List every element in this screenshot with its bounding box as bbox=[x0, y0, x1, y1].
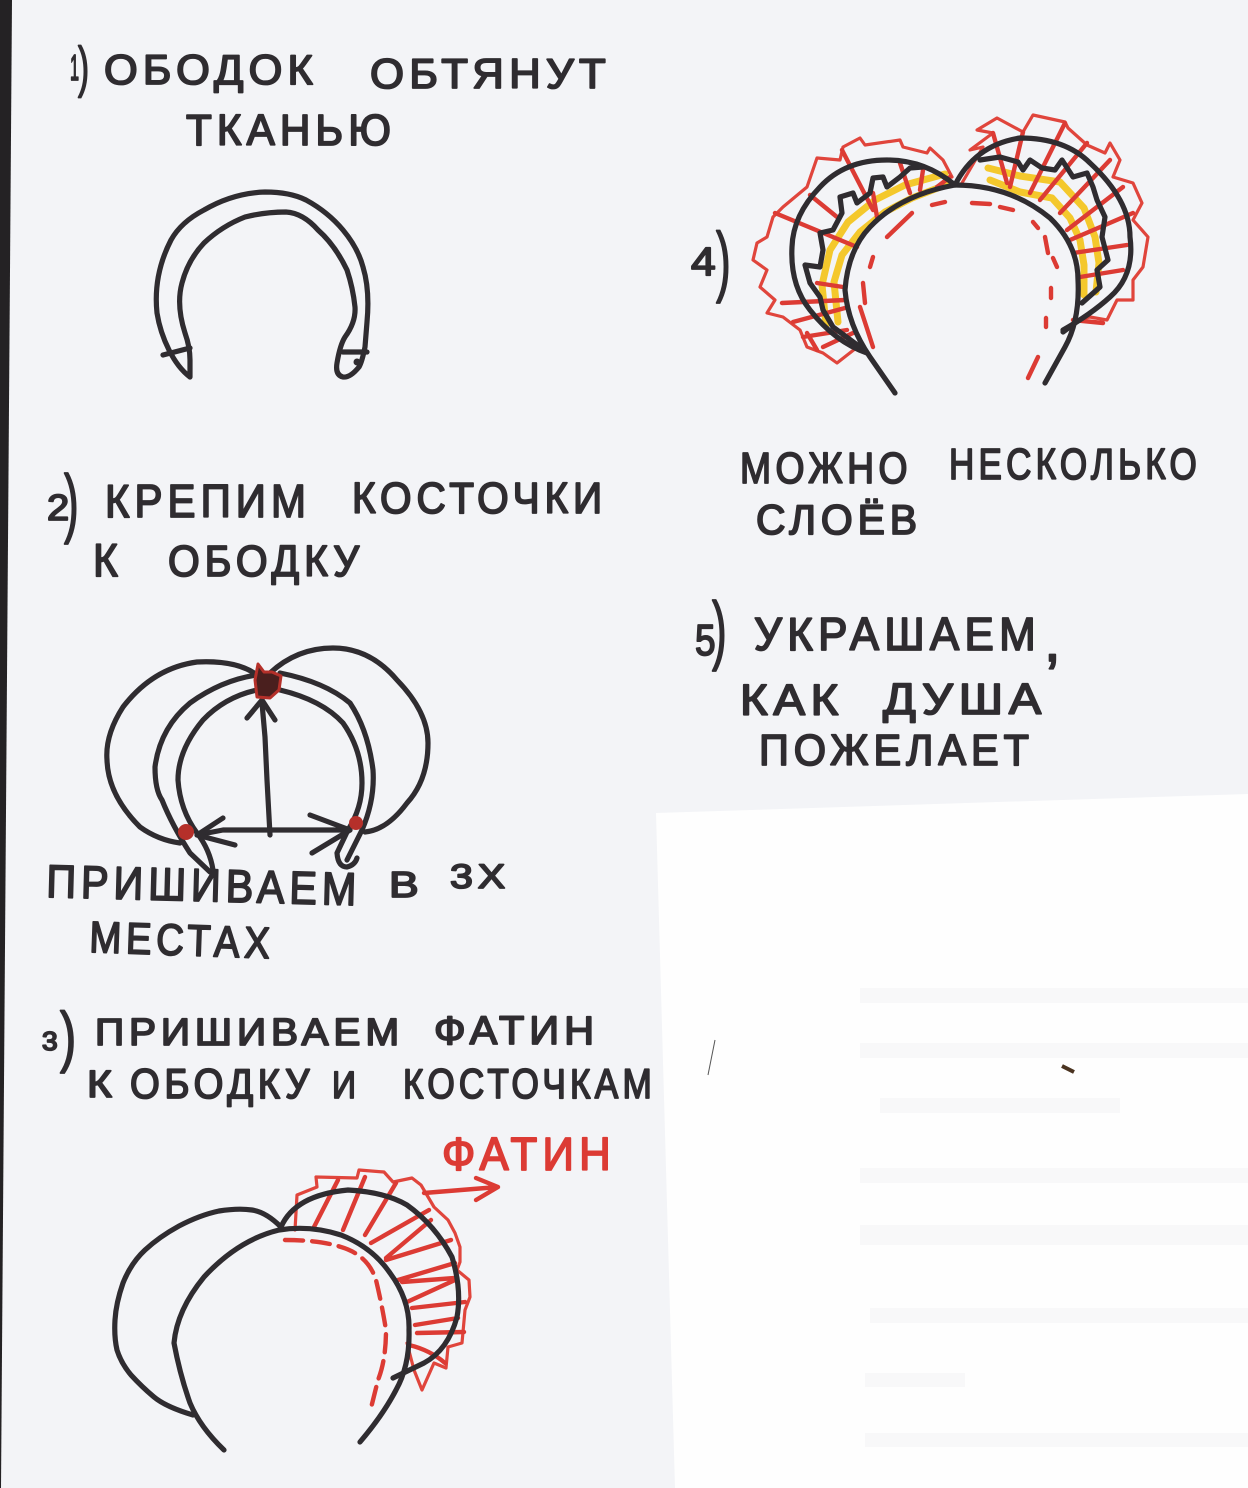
note: sew in three places: В bbox=[389, 864, 424, 905]
heading: step 1: ) bbox=[78, 35, 93, 98]
heading: step 2: КОСТОЧКИ bbox=[352, 474, 607, 523]
label: tulle: ФАТИН bbox=[442, 1128, 616, 1180]
heading: step 4: ) bbox=[716, 216, 736, 304]
panel: step 1 bbox=[70, 35, 611, 377]
note: sew in three places bbox=[46, 855, 510, 968]
heading: step 5: ДУША bbox=[883, 675, 1047, 724]
heading: step 1: 1 bbox=[70, 47, 81, 88]
scanner edge: dark strip bbox=[0, 0, 12, 1488]
drawing: wire bones attached to headband bbox=[107, 648, 428, 872]
panel: overlapping white sheet bbox=[656, 794, 1248, 1488]
note: several layers possible: МОЖНО bbox=[740, 444, 912, 493]
heading: step 2 bbox=[47, 460, 607, 586]
heading: step 3: И bbox=[332, 1065, 360, 1107]
stitch line: dashed bbox=[285, 1240, 386, 1408]
heading: step 2: ОБОДКУ bbox=[168, 537, 364, 586]
note: sew in three places: ПРИШИВАЕМ bbox=[46, 855, 362, 915]
drawing: several layers of tulle bbox=[753, 115, 1148, 393]
stitch marks bbox=[178, 664, 363, 840]
note: sew in three places: 3Х bbox=[450, 858, 510, 896]
panel: step 3 bbox=[42, 999, 656, 1450]
panel: step 4 bbox=[691, 115, 1201, 543]
heading: step 3: КОСТОЧКАМ bbox=[403, 1060, 656, 1107]
tulle frill bbox=[295, 1170, 470, 1390]
heading: step 2: К bbox=[93, 534, 123, 586]
heading: step 3: ФАТИН bbox=[434, 1009, 599, 1053]
note: sew in three places: МЕСТАХ bbox=[89, 913, 275, 968]
heading: step 3: ПРИШИВАЕМ bbox=[95, 1012, 404, 1054]
note: several layers possible bbox=[740, 440, 1201, 543]
panel: step 2 bbox=[46, 460, 607, 968]
heading: step 3: ) bbox=[60, 999, 82, 1074]
yellow layer bbox=[822, 168, 1099, 325]
heading: step 4: 4 bbox=[691, 240, 721, 284]
drawing: fabric-covered headband bbox=[156, 192, 368, 377]
heading: step 5 bbox=[695, 587, 1068, 775]
stitch line: dashed bbox=[860, 202, 1057, 378]
heading: step 1 bbox=[70, 35, 611, 155]
headband lines bbox=[115, 1190, 459, 1450]
headband and wire lines bbox=[792, 138, 1131, 393]
heading: step 5: ) bbox=[712, 587, 732, 672]
heading: step 2: ) bbox=[64, 460, 84, 545]
red frills bbox=[753, 115, 1148, 363]
heading: step 5: КАК bbox=[740, 676, 844, 725]
heading: step 5: , bbox=[1044, 607, 1068, 674]
heading: step 5: 5 bbox=[695, 616, 720, 665]
arrows: sewing points bbox=[197, 700, 350, 853]
heading: step 3 bbox=[42, 999, 656, 1107]
heading: step 4 bbox=[691, 216, 736, 304]
note: several layers possible: СЛОЁВ bbox=[756, 496, 922, 543]
heading: step 3: К bbox=[87, 1064, 117, 1106]
heading: step 5: УКРАШАЕМ bbox=[754, 608, 1041, 660]
arrow: tulle label pointer bbox=[424, 1178, 498, 1200]
drawing: tulle sewn to headband bbox=[115, 1128, 616, 1450]
heading: step 3: 3 bbox=[42, 1026, 61, 1056]
heading: step 2: КРЕПИМ bbox=[105, 475, 311, 527]
heading: step 1: ОБТЯНУТ bbox=[370, 50, 611, 97]
heading: step 2: 2 bbox=[47, 487, 74, 528]
heading: step 3: ОБОДКУ bbox=[130, 1060, 314, 1107]
heading: step 5: ПОЖЕЛАЕТ bbox=[759, 726, 1034, 775]
heading: step 1: ОБОДОК bbox=[104, 46, 318, 93]
heading: step 1: ТКАНЬЮ bbox=[186, 106, 396, 155]
panel: step 5 bbox=[695, 587, 1068, 775]
